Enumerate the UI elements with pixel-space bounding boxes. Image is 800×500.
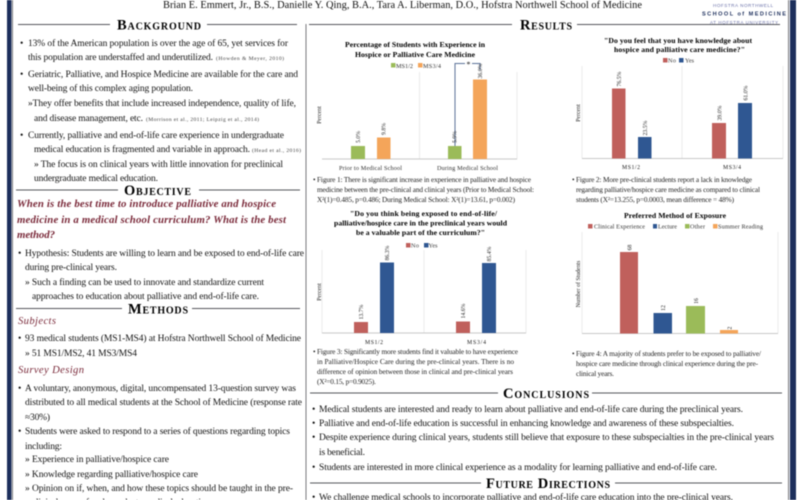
hypothesis text: • bbox=[18, 249, 21, 259]
figure 4 caption: • bbox=[572, 349, 575, 358]
chart 3 legend bbox=[406, 242, 438, 250]
figure 1 caption bbox=[313, 175, 534, 204]
heading: background: Background bbox=[117, 18, 201, 34]
subheading: subjects: Subjects bbox=[18, 316, 56, 327]
chart 3 data labels: MS1/2 bbox=[365, 340, 383, 346]
hypothesis text: approaches to education about palliative and end-of-life care. bbox=[32, 291, 259, 302]
chart 1 significance bracket bbox=[455, 60, 480, 146]
background bullets: (Howden & Meyer, 2010) bbox=[216, 55, 284, 62]
chart 1 data labels: During Medical School bbox=[437, 165, 498, 172]
conclusions bullets: Medical students are interested and ready to learn about palliative and end-of-life care during the preclinical years. bbox=[319, 404, 743, 415]
hypothesis text: Hypothesis: Students are willing to learn and be exposed to end-of-life care bbox=[25, 248, 304, 259]
background bullets: »They offer benefits that include increased independence, quality of life, bbox=[28, 98, 296, 109]
chart 1 bars bbox=[351, 80, 487, 159]
background bullets: 13% of the American population is over the age of 65, yet services for bbox=[28, 38, 289, 49]
chart 1 legend: MS1/2 bbox=[396, 63, 413, 70]
survey design text: • bbox=[18, 427, 21, 437]
chart 1 data labels: 9.8% bbox=[382, 123, 388, 135]
survey design text: A voluntary, anonymous, digital, uncompensated 13-question survey was bbox=[25, 384, 296, 394]
figure 2 caption: • bbox=[572, 175, 575, 184]
subjects text: 93 medical students (MS1-MS4) at Hofstra Northwell School of Medicine bbox=[25, 333, 301, 344]
figure 2 caption bbox=[572, 175, 760, 204]
chart 3 bars bbox=[354, 262, 496, 333]
survey design text: distributed to all medical students at the School of Medicine (response rate bbox=[25, 397, 302, 408]
heading: results: Results bbox=[520, 18, 572, 34]
chart 2 data labels: 23.5% bbox=[643, 120, 649, 135]
chart 4 legend: Summer Reading bbox=[718, 224, 763, 230]
survey design text: • bbox=[18, 384, 21, 394]
figure 4 caption: hospice care medicine through clinical experience during the pre- bbox=[576, 359, 759, 368]
chart 3: value of preclinical exposure: be a valuable part of the curriculum?" bbox=[356, 228, 485, 237]
background bullets: (Morrison et al., 2011; Leipzig et al., 2014) bbox=[146, 116, 259, 123]
chart 4 legend: Clinical Experience bbox=[594, 224, 645, 230]
chart 2 legend: No bbox=[668, 58, 676, 64]
background bullets: Geriatric, Palliative, and Hospice Medicine are available for the care and bbox=[28, 69, 298, 80]
survey design text: ≈30%) bbox=[25, 412, 50, 423]
chart 4: preferred method of exposure bbox=[572, 211, 778, 378]
chart 2 data labels: MS1/2 bbox=[622, 165, 640, 171]
left navy frame bar bbox=[7, 0, 12, 500]
survey design text: including: bbox=[25, 442, 62, 452]
panel: background bbox=[18, 18, 301, 184]
figure 4 caption bbox=[572, 349, 762, 378]
chart 4 data labels: 2 bbox=[728, 326, 734, 329]
conclusions bullets: Students are interested in more clinical experience as a modality for learning palliative and end-of-life care. bbox=[319, 462, 717, 473]
chart 2 legend bbox=[663, 58, 695, 64]
logo: Hofstra Northwell School of Medicine bbox=[702, 3, 786, 25]
chart 4 bars bbox=[620, 252, 738, 334]
chart 2: knowledge about hospice and palliative care: "Do you feel that you have knowledge about bbox=[604, 36, 752, 45]
chart 2 bars bbox=[612, 88, 752, 158]
chart 1 data labels: 5.0% bbox=[356, 131, 362, 143]
conclusions bullets: • bbox=[312, 433, 315, 443]
chart 3: value of preclinical exposure bbox=[313, 209, 526, 386]
chart 1 data labels: 36.0% bbox=[478, 63, 484, 78]
chart 2 legend: Yes bbox=[685, 58, 695, 64]
chart 3: value of preclinical exposure: palliative/hospice care in the preclinical years would bbox=[334, 218, 508, 228]
figure 3 caption: • bbox=[313, 347, 316, 356]
chart 3 data labels: 86.3% bbox=[385, 245, 391, 260]
chart 2 data labels: 76.5% bbox=[617, 71, 623, 86]
figure 2 caption: students (X²=13.255, p=0.0003, mean difference = 48%) bbox=[576, 195, 735, 204]
logo: Hofstra Northwell School of Medicine: HOFSTRA NORTHWELL bbox=[713, 3, 773, 8]
survey design text: » Opinion on if, when, and how these topics should be taught in the pre- bbox=[25, 483, 293, 494]
chart 1 legend: MS3/4 bbox=[423, 63, 441, 70]
hypothesis text bbox=[18, 248, 304, 302]
chart 4: preferred method of exposure: Preferred Method of Exposure bbox=[624, 211, 727, 220]
chart 4 legend: Lecture bbox=[658, 224, 677, 230]
heading: conclusions: Conclusions bbox=[503, 386, 589, 402]
chart 1: experience in hospice or palliative care: Hospice or Palliative Care Medicine bbox=[355, 50, 476, 59]
chart 1 data labels: Prior to Medical School bbox=[339, 165, 402, 172]
survey design text: » Experience in palliative/hospice care bbox=[25, 455, 169, 465]
chart 3 data labels: Percent bbox=[317, 283, 323, 301]
panel: future directions bbox=[310, 476, 782, 500]
conclusions bullets: is beneficial. bbox=[319, 447, 365, 458]
logo: Hofstra Northwell School of Medicine: AT HOFSTRA UNIVERSITY bbox=[710, 20, 778, 25]
chart 2: knowledge about hospice and palliative care: hospice and palliative care medicine?" bbox=[614, 45, 745, 54]
figure 2 caption: regarding palliative/hospice care medicine as compared to clinical bbox=[576, 185, 760, 194]
chart 1: experience in hospice or palliative care: Percentage of Students with Experience in bbox=[345, 40, 486, 49]
conclusions bullets bbox=[312, 404, 774, 473]
hypothesis text: » Such a finding can be used to innovate and standardize current bbox=[25, 277, 264, 288]
objective question: medicine in a medical school curriculum? What is the best bbox=[17, 214, 287, 226]
chart 3 data labels: 13.7% bbox=[359, 304, 365, 319]
chart 4 legend bbox=[588, 224, 763, 230]
figure 1 caption: medicine between the pre-clinical and clinical years (Prior to Medical School: bbox=[317, 185, 534, 194]
chart 2 data labels: 61.0% bbox=[744, 85, 750, 100]
chart 2 data labels: 39.0% bbox=[718, 105, 724, 120]
figure 1 caption: • bbox=[313, 175, 316, 184]
objective question bbox=[17, 198, 287, 241]
background bullets: • bbox=[20, 131, 23, 141]
background bullets: medical education is fragmented and variable in approach. bbox=[34, 144, 250, 155]
figure 3 caption: in Palliative/Hospice Care during the pre-clinical years. There is no bbox=[317, 357, 514, 366]
figure 4 caption: Figure 4: A majority of students prefer to be exposed to palliative/ bbox=[576, 349, 762, 358]
authors line: Brian E. Emmert, Jr., B.S., Danielle Y. Qing, B.A., Tara A. Liberman, D.O., Hofstra Northwell School of Medicine bbox=[163, 0, 642, 11]
figure 3 caption bbox=[313, 347, 518, 386]
survey design text: Students were asked to respond to a series of questions regarding topics bbox=[25, 426, 290, 437]
background bullets: (Head et al., 2016) bbox=[252, 147, 301, 154]
chart 2 data labels bbox=[576, 71, 750, 171]
objective question: method? bbox=[17, 229, 56, 241]
subjects text: » 51 MS1/MS2, 41 MS3/MS4 bbox=[25, 349, 137, 359]
background bullets: • bbox=[20, 70, 23, 80]
background bullets: well-being of this complex aging population. bbox=[28, 83, 193, 94]
chart 1 legend bbox=[391, 63, 441, 70]
chart 3 data labels: MS3/4 bbox=[467, 340, 486, 346]
logo: Hofstra Northwell School of Medicine: SCHOOL of MEDICINE bbox=[702, 12, 786, 18]
chart 4 data labels: 68 bbox=[628, 244, 634, 250]
chart 2 data labels: Percent bbox=[576, 104, 582, 122]
chart 4 data labels: 12 bbox=[661, 305, 667, 311]
background bullets: this population are understaffed and underutilized. bbox=[28, 52, 213, 63]
chart 1: experience in hospice or palliative care bbox=[313, 40, 534, 204]
chart 3 data labels bbox=[317, 245, 493, 346]
chart 3 data labels: 14.6% bbox=[461, 303, 467, 318]
figure 2 caption: Figure 2: More pre-clinical students report a lack in knowledge bbox=[576, 175, 752, 184]
conclusions bullets: Despite experience during clinical years, students still believe that exposure to these subspecialties in the pre-clinical years bbox=[319, 433, 774, 443]
figure 1 caption: X²(1)=0.485, p=0.486; During Medical School: X²(1)=13.61, p=0.002) bbox=[317, 195, 516, 204]
figure 4 caption: clinical years. bbox=[576, 369, 614, 378]
background bullets: • bbox=[20, 39, 23, 49]
subjects text bbox=[18, 333, 301, 359]
subheading: survey design: Survey Design bbox=[18, 365, 84, 376]
heading: future directions: Future Directions bbox=[486, 476, 610, 492]
background bullets: undergraduate medical education. bbox=[34, 174, 158, 184]
chart 2 data labels: MS3/4 bbox=[723, 165, 741, 171]
chart 4 data labels bbox=[575, 244, 734, 329]
chart 1 significance bracket: * bbox=[466, 60, 470, 69]
conclusions bullets: • bbox=[312, 419, 315, 429]
background bullets: » The focus is on clinical years with little innovation for preclinical bbox=[34, 159, 283, 170]
heading: methods: Methods bbox=[128, 302, 188, 318]
conclusions bullets: • bbox=[312, 405, 315, 415]
subjects text: • bbox=[18, 334, 21, 344]
chart 1 data labels: 5.9% bbox=[452, 131, 458, 143]
figure 1 caption: Figure 1: There is significant increase in experience in palliative and hospice bbox=[317, 175, 531, 184]
chart 3 data labels: 85.4% bbox=[487, 246, 493, 261]
panel: methods bbox=[16, 302, 302, 500]
figure 3 caption: difference of opinion between those in clinical and pre-clinical years bbox=[317, 367, 513, 376]
chart 4 data labels: 16 bbox=[694, 298, 700, 304]
conclusions bullets: • bbox=[312, 463, 315, 473]
survey design text: » Knowledge regarding palliative/hospice care bbox=[25, 470, 198, 480]
right navy frame bar bbox=[790, 0, 796, 500]
hypothesis text: during pre-clinical years. bbox=[25, 263, 117, 273]
objective question: When is the best time to introduce palliative and hospice bbox=[17, 198, 276, 210]
chart 2: knowledge about hospice and palliative care bbox=[572, 36, 783, 204]
background bullets bbox=[20, 38, 301, 184]
survey design text bbox=[18, 384, 302, 500]
heading: objective: Objective bbox=[124, 183, 191, 199]
chart 4 legend: Other bbox=[690, 224, 705, 230]
chart 3 legend: No bbox=[411, 242, 419, 250]
chart 1 data labels: Percent bbox=[317, 106, 323, 124]
chart 3: value of preclinical exposure: "Do you think being exposed to end-of-life/ bbox=[350, 209, 498, 218]
chart 1 data labels bbox=[317, 63, 498, 172]
figure 3 caption: (X²=0.15, p=0.9025). bbox=[317, 377, 376, 386]
panel: conclusions bbox=[310, 386, 782, 473]
background bullets: and disease management, etc. bbox=[34, 114, 143, 124]
panel: objective bbox=[16, 183, 304, 302]
chart 3 legend: Yes bbox=[428, 242, 438, 250]
background bullets: Currently, palliative and end-of-life care experience in undergraduate bbox=[28, 130, 284, 141]
chart 4 data labels: Number of Students bbox=[575, 260, 582, 307]
conclusions bullets: Palliative and end-of-life education is successful in enhancing knowledge and awareness of these subspecialties. bbox=[319, 418, 734, 429]
figure 3 caption: Figure 3: Significantly more students find it valuable to have experience bbox=[317, 347, 518, 356]
